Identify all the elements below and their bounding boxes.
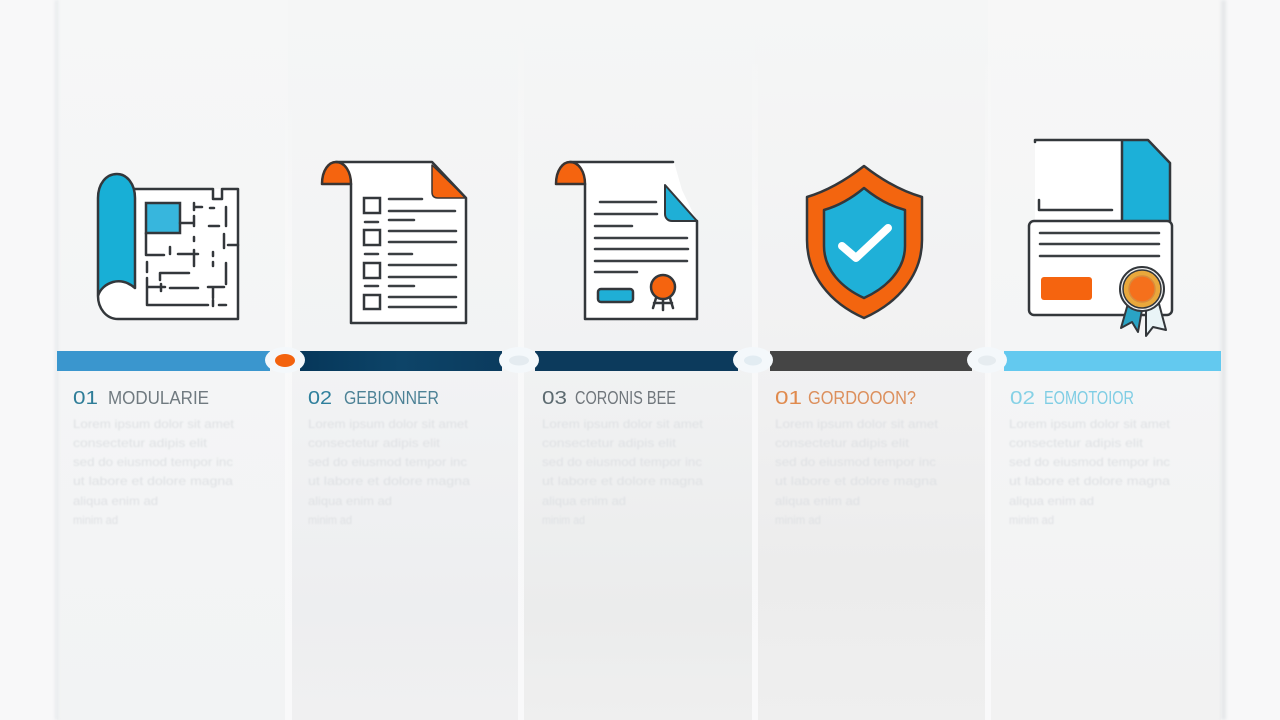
- step 2 description: consectetur adipis elit: [308, 436, 441, 450]
- step 3 description: Lorem ipsum dolor sit amet: [542, 417, 704, 431]
- step 1 description: ut labore et dolore magna: [73, 474, 233, 488]
- timeline node 2: [499, 347, 539, 373]
- step 3 description: minim ad: [542, 513, 585, 527]
- step 1 description: [73, 417, 235, 527]
- step 2 description: aliqua enim ad: [308, 494, 392, 508]
- step 4 title: GORDOOON?: [808, 388, 916, 408]
- step 3 description: consectetur adipis elit: [542, 436, 677, 450]
- icon: checklist document: [322, 162, 466, 323]
- step 2 title: [308, 388, 439, 408]
- icon: blueprint scroll: [98, 174, 238, 319]
- step 3 description: sed do eiusmod tempor inc: [542, 455, 702, 469]
- step 5 description: consectetur adipis elit: [1009, 436, 1144, 450]
- step 2 description: Lorem ipsum dolor sit amet: [308, 417, 469, 431]
- step 1 title: 01: [73, 388, 98, 408]
- step 2 description: sed do eiusmod tempor inc: [308, 455, 467, 469]
- step 3 description: aliqua enim ad: [542, 494, 626, 508]
- step 4 description: aliqua enim ad: [775, 494, 860, 508]
- step 3 title: 03: [542, 388, 567, 408]
- step 5 title: 02: [1010, 388, 1035, 408]
- timeline node 4: [967, 347, 1007, 373]
- step 1 description: minim ad: [73, 513, 118, 527]
- step 2 title: GEBIONNER: [344, 388, 439, 408]
- step 4 description: ut labore et dolore magna: [775, 474, 937, 488]
- panel: step 1: [57, 0, 288, 720]
- step 4 description: Lorem ipsum dolor sit amet: [775, 417, 939, 431]
- icon: certificate document: [556, 162, 697, 319]
- timeline node 3: [733, 347, 773, 373]
- step 1 description: Lorem ipsum dolor sit amet: [73, 417, 235, 431]
- step 4 description: consectetur adipis elit: [775, 436, 910, 450]
- step 2 description: minim ad: [308, 513, 352, 527]
- step 3 title: CORONIS BEE: [575, 388, 676, 408]
- step 5 description: minim ad: [1009, 513, 1054, 527]
- panel: step 5: [988, 0, 1221, 720]
- panel: step 3: [521, 0, 755, 720]
- step 5 description: Lorem ipsum dolor sit amet: [1009, 417, 1171, 431]
- step 1 description: consectetur adipis elit: [73, 436, 208, 450]
- panel: step 4: [755, 0, 988, 720]
- icon: certificate with ribbon badge: [1029, 139, 1172, 336]
- icon: shield with check mark: [807, 166, 922, 318]
- step 2 description: [308, 417, 470, 527]
- step 5 title: [1010, 388, 1134, 408]
- step 3 description: [542, 417, 704, 527]
- step 4 description: sed do eiusmod tempor inc: [775, 455, 936, 469]
- step 5 description: aliqua enim ad: [1009, 494, 1094, 508]
- step 3 description: ut labore et dolore magna: [542, 474, 703, 488]
- step 2 title: 02: [308, 388, 332, 408]
- panel: step 2: [288, 0, 521, 720]
- step 5 description: [1009, 417, 1171, 527]
- step 1 title: MODULARIE: [108, 388, 209, 408]
- step 4 description: [775, 417, 939, 527]
- step 1 description: aliqua enim ad: [73, 494, 158, 508]
- step 5 description: sed do eiusmod tempor inc: [1009, 455, 1170, 469]
- step 1 description: sed do eiusmod tempor inc: [73, 455, 233, 469]
- timeline bar: [57, 347, 1221, 373]
- timeline node 1: [265, 347, 305, 373]
- step 5 description: ut labore et dolore magna: [1009, 474, 1170, 488]
- step 4 title: 01: [775, 388, 802, 408]
- step 5 title: EOMOTOIOR: [1044, 388, 1134, 408]
- step 3 title: [542, 388, 676, 408]
- step 2 description: ut labore et dolore magna: [308, 474, 470, 488]
- step 4 description: minim ad: [775, 513, 821, 527]
